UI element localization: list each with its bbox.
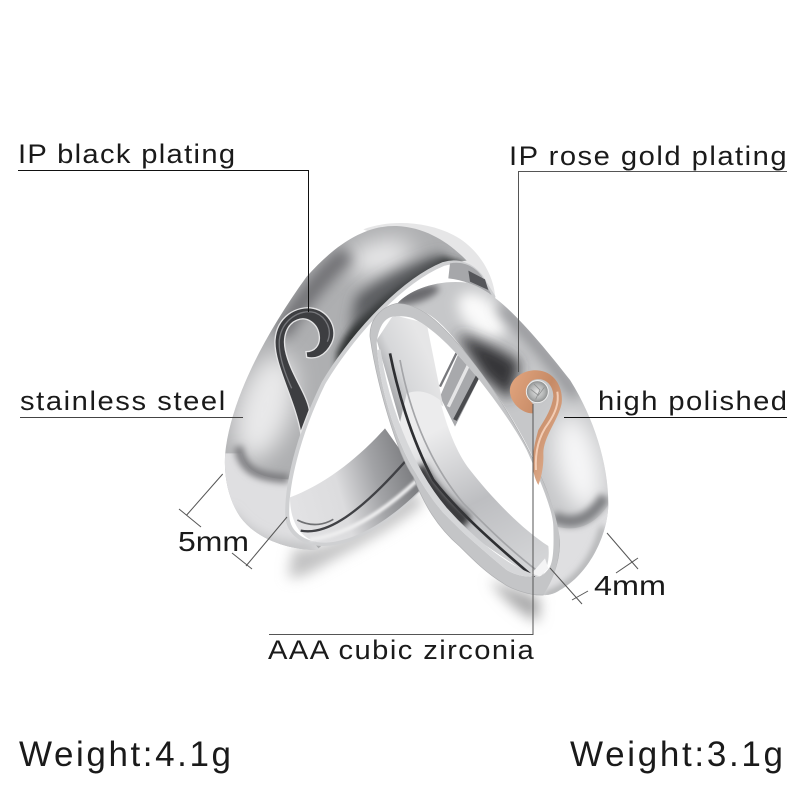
- infographic canvas: [18, 144, 787, 774]
- left ring inner surface: [290, 428, 425, 543]
- callout: high polished: high polished: [598, 386, 787, 416]
- dimension: 4mm: [550, 533, 666, 604]
- left ring far inside edge: [448, 263, 492, 295]
- right ring opening: [377, 316, 554, 577]
- right ring inside contents: [377, 315, 549, 580]
- ring: left ring with black half heart: [220, 223, 495, 550]
- right ring rim: [370, 303, 560, 595]
- callout: IP black plating: IP black plating: [18, 139, 235, 169]
- callout: IP rose gold plating: IP rose gold plating: [509, 141, 787, 171]
- right ring dark groove: [390, 353, 535, 578]
- dimension: 4mm: 4mm: [594, 570, 666, 601]
- dimension: 5mm: [178, 474, 287, 569]
- icon: rose gold half heart: [510, 370, 562, 485]
- right ring inner surface upper: [377, 316, 444, 422]
- right ring shading: [392, 281, 613, 600]
- left ring shading: [220, 234, 467, 550]
- icon: cubic zirconia stone: [526, 381, 548, 403]
- weight label: right ring: Weight:3.1g: [570, 735, 783, 774]
- callout: AAA cubic zirconia: AAA cubic zirconia: [268, 635, 534, 665]
- weight label: left ring: Weight:4.1g: [19, 735, 231, 774]
- right ring band face: [397, 282, 608, 595]
- left ring top crescent: [363, 223, 495, 298]
- callout: IP black plating: [18, 139, 308, 312]
- dimension: 5mm: 5mm: [178, 526, 249, 557]
- icon: black half heart: [275, 308, 334, 433]
- callout: AAA cubic zirconia: [268, 404, 534, 665]
- left ring opening and rim: [287, 262, 493, 544]
- ground shadow: right ring: [490, 580, 540, 622]
- photo: pair of rings: [220, 223, 613, 622]
- right ring inner surface lower: [397, 391, 549, 580]
- left ring inner groove: [301, 462, 405, 531]
- left ring far side seen through opening: [441, 355, 479, 426]
- left ring band face: [225, 226, 467, 550]
- callout: IP rose gold plating: [509, 141, 787, 372]
- ground shadow: left ring: [288, 490, 423, 578]
- callout: stainless steel: stainless steel: [20, 386, 225, 416]
- ring: right ring with rose gold half heart: [370, 281, 613, 600]
